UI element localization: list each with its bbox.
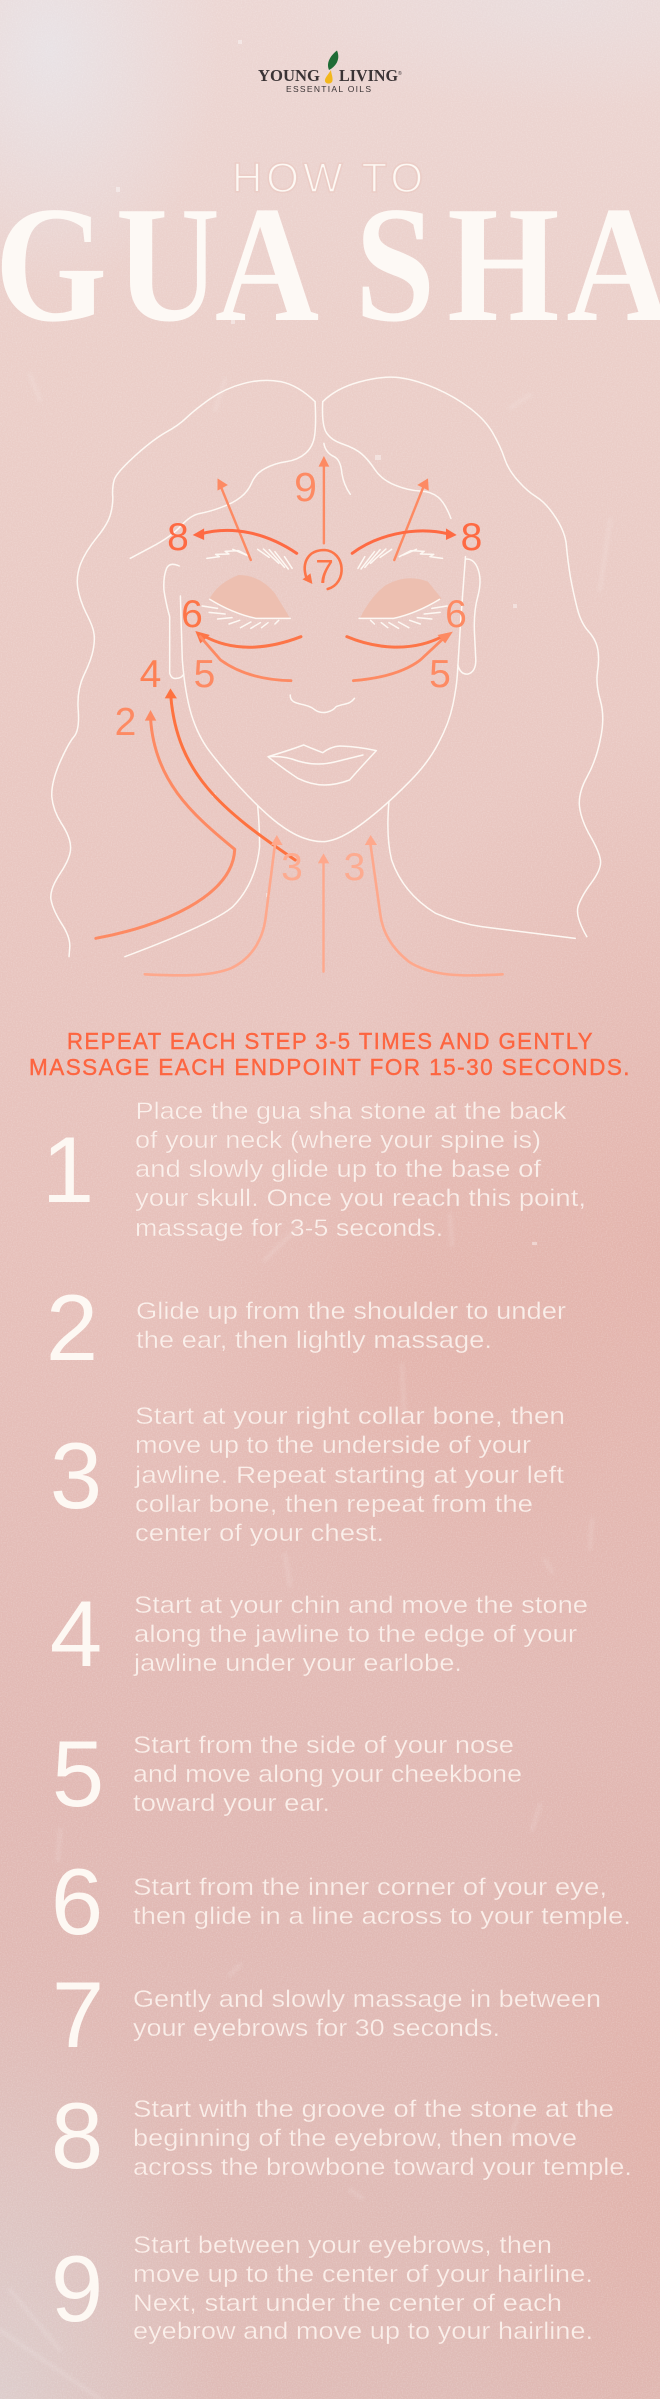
step 1 text: massage for 3-5 seconds.	[135, 1215, 443, 1242]
diagram numerals: 6	[445, 593, 467, 636]
title: how to: HOW TO	[232, 154, 423, 201]
step 1 text	[135, 1098, 586, 1242]
diagram numerals: 5	[194, 653, 215, 696]
arrow: step 7 circular	[302, 550, 342, 589]
number 3: 3	[50, 1423, 102, 1528]
number 2: 2	[46, 1275, 98, 1380]
logo: Young Living Essential Oils: ®	[398, 70, 402, 77]
step 6 text: then glide in a line across to your temple.	[133, 1903, 631, 1930]
step 9	[51, 2232, 593, 2345]
step 2	[46, 1275, 566, 1380]
step 1 text: of your neck (where your spine is)	[135, 1127, 541, 1154]
step 3 text: collar bone, then repeat from the	[135, 1491, 533, 1518]
step 9 text	[133, 2232, 593, 2345]
step 1 text: and slowly glide up to the base of	[135, 1156, 541, 1183]
step 3 text: center of your chest.	[135, 1520, 384, 1547]
number 5: 5	[52, 1721, 104, 1826]
step 3 text: Start at your right collar bone, then	[135, 1403, 565, 1430]
step 9 text: Start between your eyebrows, then	[133, 2232, 552, 2259]
arrow: step 9 left	[218, 478, 251, 560]
diagram numerals: 9	[294, 464, 317, 510]
step 5	[52, 1721, 522, 1826]
step 4 text	[133, 1592, 588, 1677]
step 1 text: your skull. Once you reach this point,	[135, 1185, 586, 1212]
diagram numerals: 4	[140, 653, 161, 696]
step 6 text: Start from the inner corner of your eye,	[133, 1874, 607, 1901]
diagram numerals	[115, 464, 482, 889]
step 3 text: move up to the underside of your	[135, 1432, 531, 1459]
step 3	[50, 1403, 565, 1547]
instruction heading	[29, 1028, 631, 1080]
diagram numerals: 5	[429, 653, 451, 696]
step 9 text: Next, start under the center of each	[133, 2290, 562, 2317]
title: gua sha: GUASHA	[0, 172, 660, 356]
diagram numerals: 8	[167, 516, 189, 559]
line art: hair and face	[51, 377, 603, 957]
step 8 text: beginning of the eyebrow, then move	[133, 2125, 577, 2152]
step 8 text: Start with the groove of the stone at the	[133, 2096, 614, 2123]
step 2 text: Glide up from the shoulder to under	[136, 1298, 566, 1325]
diagram numerals: 3	[281, 846, 303, 889]
logo: Young Living Essential Oils	[258, 50, 402, 94]
number 1: 1	[42, 1117, 94, 1222]
arrow: step 3 right	[365, 835, 503, 975]
step 7 text: Gently and slowly massage in between	[133, 1986, 601, 2013]
step 3 text	[134, 1403, 565, 1547]
logo: Young Living Essential Oils: YOUNG	[258, 66, 320, 85]
step 2 text: the ear, then lightly massage.	[136, 1327, 492, 1354]
step 5 text	[133, 1732, 522, 1817]
arrow: step 4	[165, 688, 295, 860]
step 7 text: your eyebrows for 30 seconds.	[133, 2015, 500, 2042]
arrow: step 3 center	[318, 853, 329, 972]
step 4 text: jawline under your earlobe.	[133, 1650, 462, 1677]
arrow: step 5 right	[353, 635, 447, 681]
arrow: step 5 left	[200, 637, 291, 681]
instruction heading: REPEAT EACH STEP 3-5 TIMES AND GENTLY	[67, 1028, 594, 1054]
step 8 text	[133, 2096, 632, 2181]
number 4: 4	[50, 1581, 102, 1686]
step 3 text: jawline. Repeat starting at your left	[134, 1462, 564, 1489]
step 8	[51, 2083, 632, 2188]
step 5 text: Start from the side of your nose	[133, 1732, 514, 1759]
step 1 text: Place the gua sha stone at the back	[136, 1098, 568, 1125]
number 8: 8	[51, 2083, 103, 2188]
instruction heading: MASSAGE EACH ENDPOINT FOR 15-30 SECONDS.	[29, 1054, 631, 1080]
step 4 text: Start at your chin and move the stone	[134, 1592, 588, 1619]
step 4	[50, 1581, 588, 1686]
arrow: step 8 left	[193, 528, 297, 553]
step 5 text: and move along your cheekbone	[133, 1761, 522, 1788]
face diagram	[51, 377, 603, 975]
arrow: step 6 left	[195, 631, 301, 647]
logo: Young Living Essential Oils: LIVING	[339, 66, 398, 85]
step 7 text	[133, 1986, 601, 2042]
diagram numerals: 6	[181, 593, 203, 636]
step 9 text: eyebrow and move up to your hairline.	[133, 2318, 593, 2345]
arrow: step 2	[96, 710, 235, 938]
diagram numerals: 7	[315, 553, 334, 590]
step 7	[52, 1962, 601, 2067]
step 5 text: toward your ear.	[133, 1790, 330, 1817]
step 9 text: move up to the center of your hairline.	[133, 2261, 593, 2288]
diagram numerals: 3	[344, 846, 365, 889]
step 1	[42, 1098, 586, 1242]
arrow: step 9 right	[394, 478, 429, 560]
step 2 text	[136, 1298, 566, 1354]
eyelids	[210, 575, 441, 618]
eyelashes and eyebrows	[202, 549, 447, 628]
diagram numerals: 8	[461, 516, 482, 559]
number 6: 6	[51, 1849, 103, 1954]
number 7: 7	[52, 1962, 104, 2067]
arrow: step 9 center	[319, 456, 329, 543]
arrow: step 3 left	[145, 835, 283, 975]
diagram numerals: 2	[115, 701, 136, 744]
step 6	[51, 1849, 631, 1954]
arrow: step 6 right	[347, 632, 453, 647]
number 9: 9	[51, 2236, 103, 2341]
step 8 text: across the browbone toward your temple.	[133, 2154, 632, 2181]
step 6 text	[133, 1874, 631, 1930]
arrow: step 8 right	[352, 528, 457, 553]
step 4 text: along the jawline to the edge of your	[134, 1621, 577, 1648]
logo: Young Living Essential Oils: ESSENTIAL OILS	[286, 84, 371, 94]
